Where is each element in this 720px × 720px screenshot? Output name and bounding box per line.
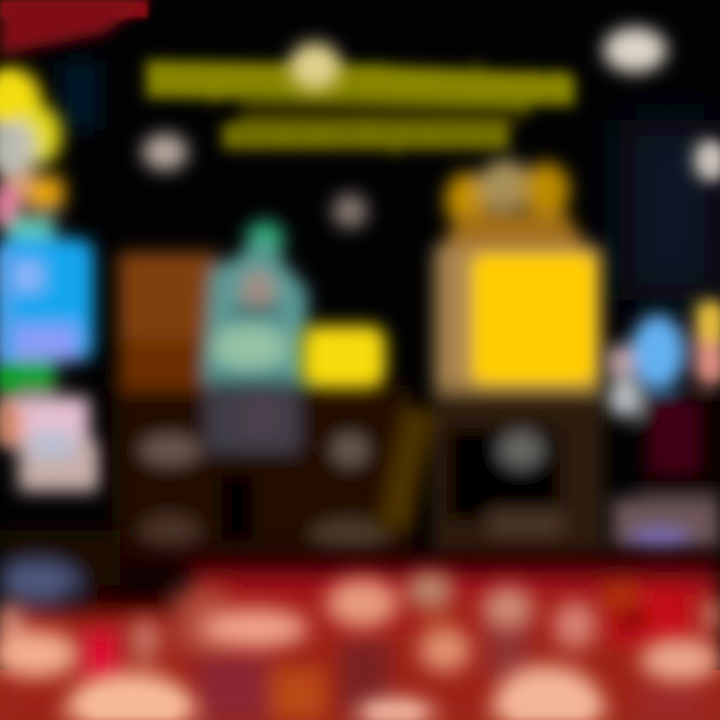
- yellow label: [302, 325, 386, 389]
- centre-left panel: brown screen and teal figure: [112, 220, 412, 557]
- title: Popcorn Earnings: [146, 55, 570, 104]
- popcorn floor: kernels: [0, 572, 720, 720]
- right panel: gold popcorn and yellow board: [376, 159, 604, 557]
- popcorn floor: bottom edge: [85, 700, 590, 720]
- title: [146, 55, 575, 156]
- popcorn clouds in the sky: [142, 27, 720, 229]
- yellow board core: [482, 262, 582, 374]
- left figure edge colours: [0, 75, 14, 442]
- left figure: [0, 68, 100, 492]
- popcorn floor: base: [0, 530, 720, 720]
- right figure edge colours: [708, 145, 720, 380]
- title: From Sports: [222, 115, 508, 156]
- right figure: [605, 302, 720, 552]
